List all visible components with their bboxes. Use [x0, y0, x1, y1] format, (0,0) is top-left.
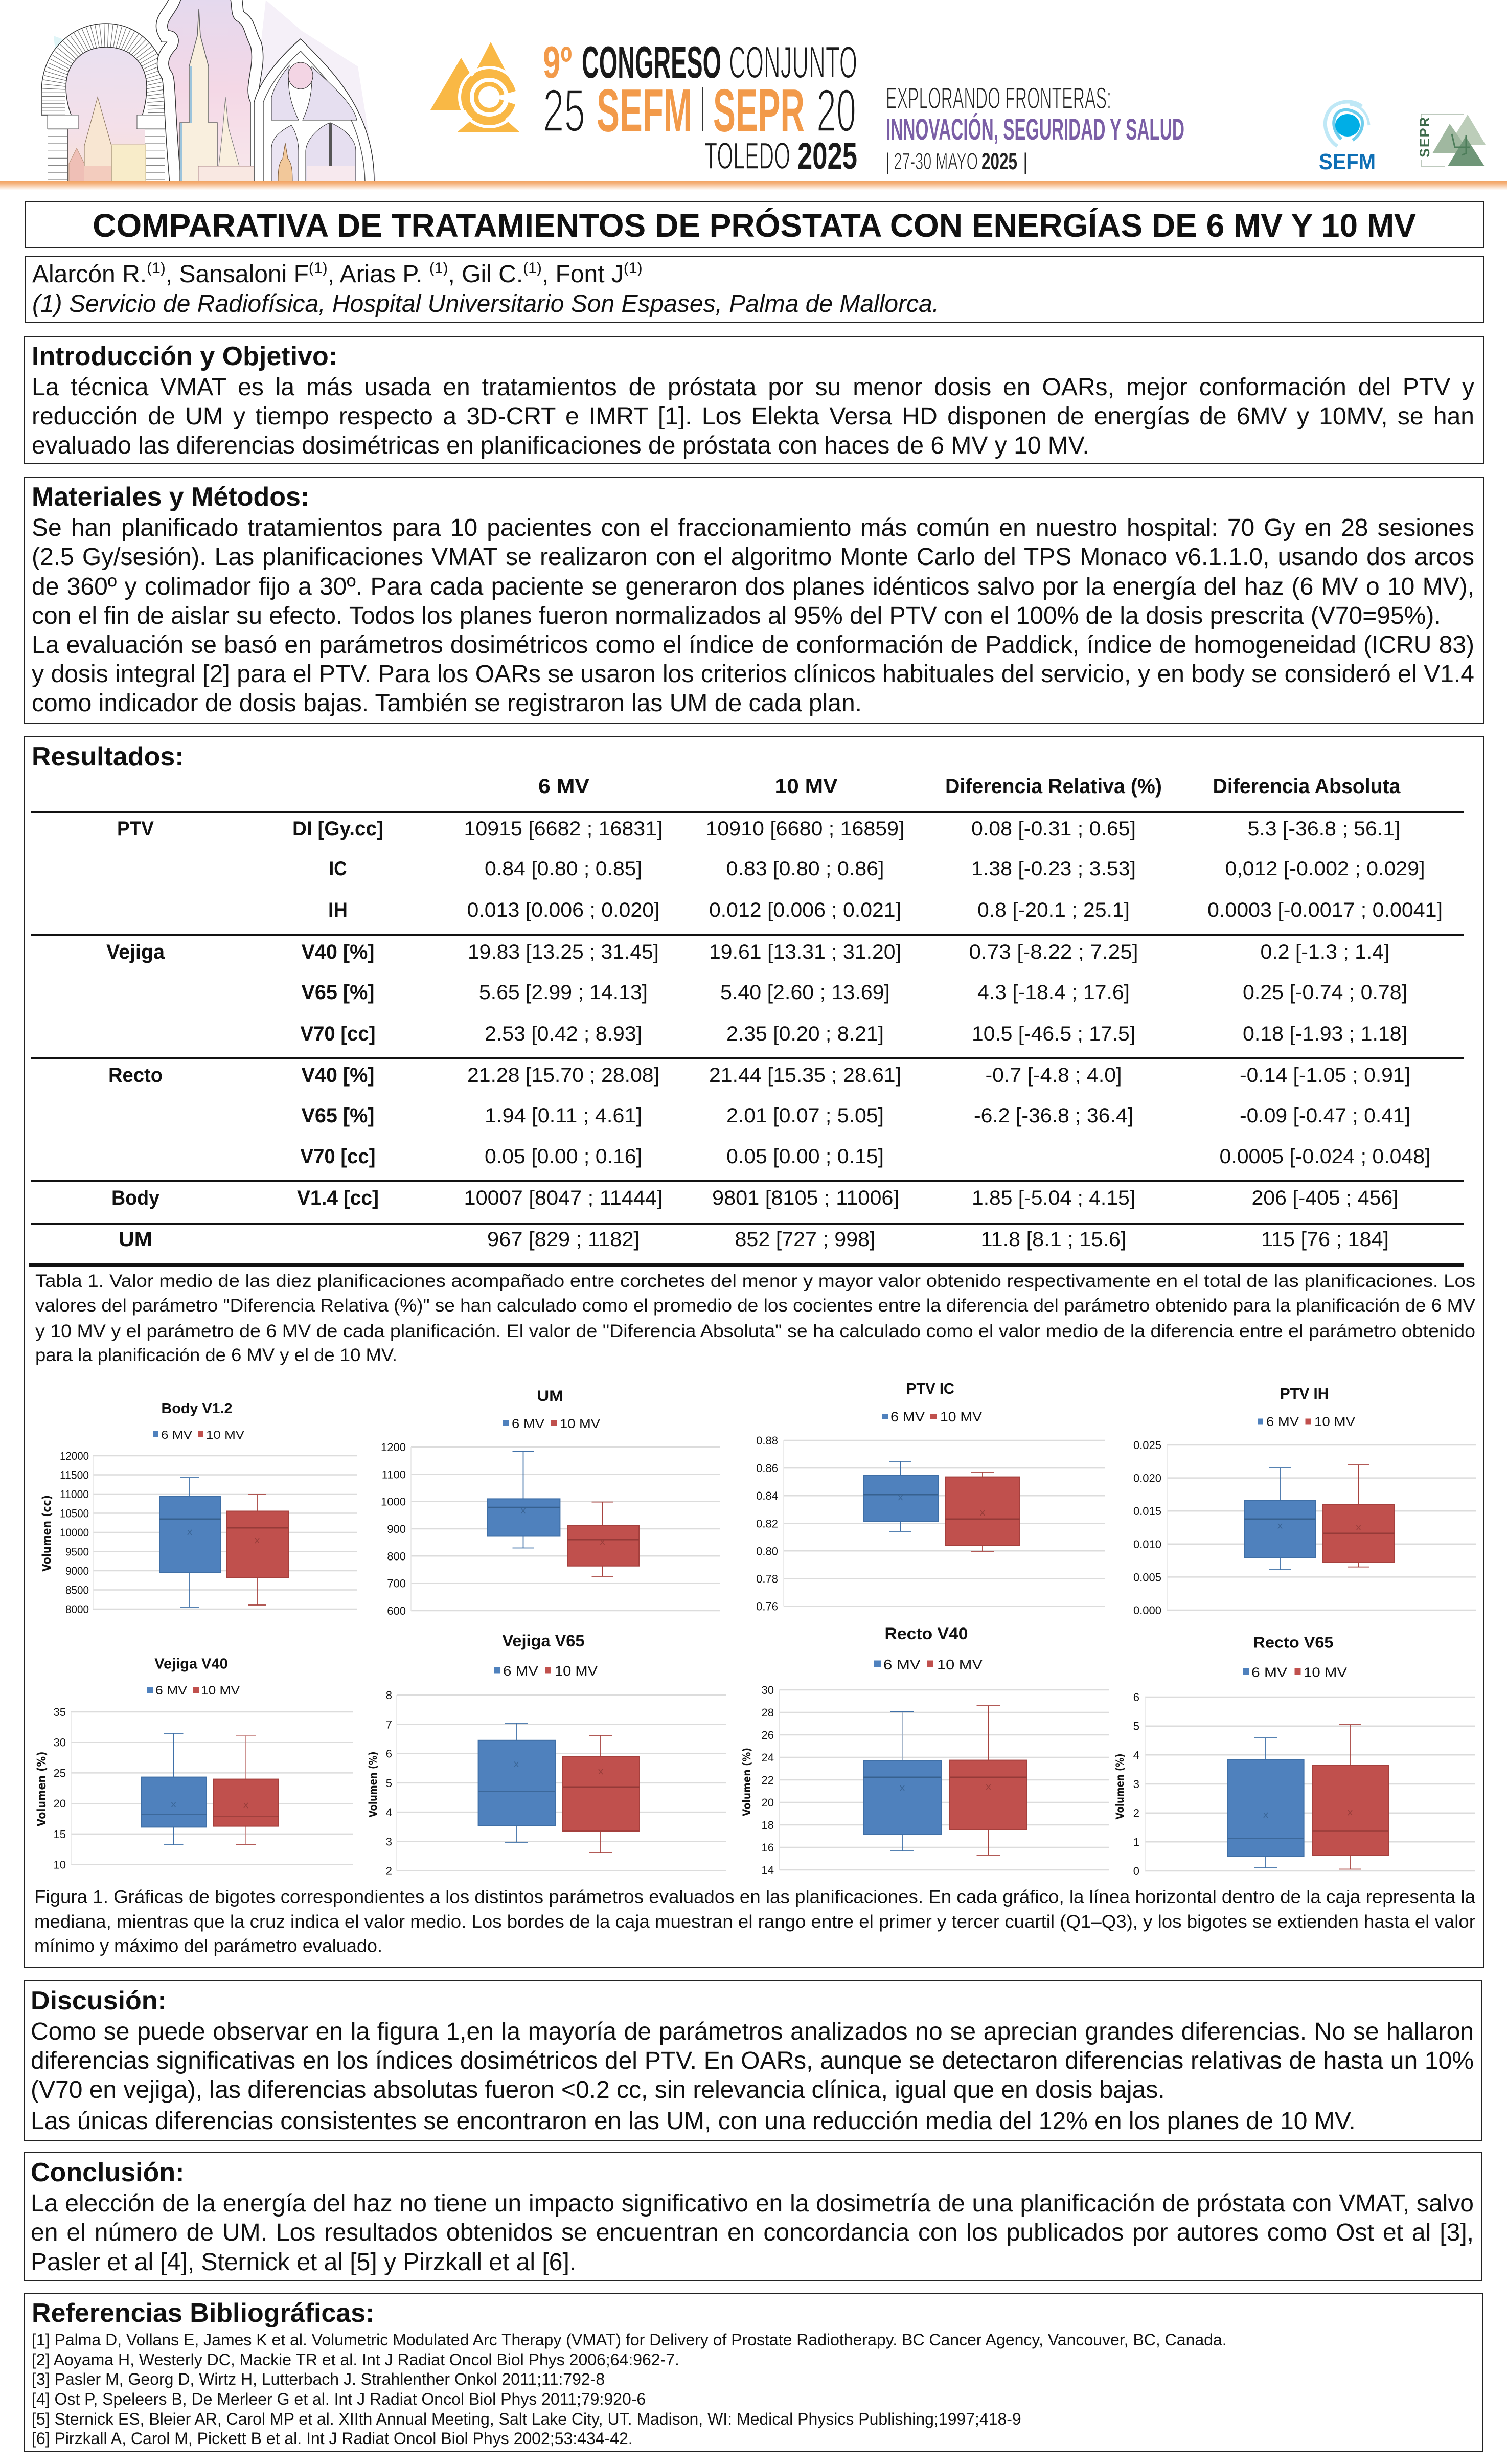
legend: 6 MV — [512, 1417, 544, 1431]
y axis labels — [756, 1434, 778, 1613]
y axis labels — [1133, 1439, 1161, 1617]
y axis labels: 2 — [1133, 1807, 1139, 1820]
table group: Vejiga: 19.61 [13.31 ; 31.20] — [709, 941, 901, 963]
heading: materials and methods: Materiales y Métodos: — [32, 482, 309, 512]
table group: Vejiga: 4.3 [-18.4 ; 17.6] — [977, 981, 1130, 1004]
table group: Recto: 0.05 [0.00 ; 0.16] — [485, 1145, 642, 1168]
table group: PTV: 0.84 [0.80 ; 0.85] — [485, 857, 642, 880]
table group: Recto: -0.14 [-1.05 ; 0.91] — [1240, 1064, 1410, 1087]
table group: PTV: 0.8 [-20.1 ; 25.1] — [977, 899, 1130, 921]
reference list: [3] Pasler M, Georg D, Wirtz H, Lutterbach J. Strahlenther Onkol 2011;11:792-8 — [32, 2370, 605, 2388]
y axis labels: 30 — [54, 1736, 66, 1749]
table header row: 10 MV — [775, 775, 838, 798]
legend — [147, 1684, 240, 1698]
table: dosimetric results — [29, 775, 1464, 1267]
text block: materials and methods: Se han planificado tratamientos para 10 pacientes con el fraccionamiento más común en nuestro hospital: 70 Gy en 28 sesiones — [32, 514, 1474, 541]
congress name — [543, 37, 857, 177]
y axis labels: 7 — [386, 1718, 392, 1731]
y axis labels: 1 — [1133, 1836, 1139, 1848]
table caption — [35, 1271, 1476, 1365]
legend — [882, 1409, 982, 1425]
y axis labels: 8000 — [65, 1603, 89, 1616]
legend: 10 MV — [1314, 1415, 1355, 1429]
illustration: Toledo arches and towers — [41, 0, 376, 182]
legend — [494, 1663, 598, 1679]
y axis labels: 0.005 — [1133, 1571, 1161, 1584]
text block: materials and methods: y dosis integral [2] para el PTV. Para los OARs se usaron los criterios clínicos habituales del servicio, y en body se consideró el V1.4 — [32, 661, 1474, 688]
results figure area — [29, 775, 1476, 1956]
y axis labels: 30 — [762, 1684, 774, 1697]
box: 6 MV — [488, 1451, 560, 1548]
table row: Body: 9801 [8105 ; 11006] — [712, 1187, 899, 1209]
reference list: [5] Sternick ES, Bleier AR, Carol MP et al. XIIth Annual Meeting, Salt Lake City, UT. Madison, WI: Medical Physics Publishing;1997;418-9 — [32, 2410, 1021, 2428]
y axis labels: 11000 — [60, 1488, 89, 1501]
y axis labels: 0.020 — [1133, 1472, 1161, 1485]
y axis labels: 6 — [386, 1748, 392, 1760]
text block: materials and methods: (2.5 Gy/sesión). Las planificaciones VMAT se realizaron con el algoritmo Monte Carlo del TPS Monaco v6.1.1.0, usando dos arcos — [32, 544, 1474, 571]
y axis labels: 900 — [387, 1523, 406, 1535]
y axis labels: 0.78 — [756, 1572, 778, 1585]
y axis labels: 700 — [387, 1577, 406, 1590]
table group: Recto: 21.44 [15.35 ; 28.61] — [709, 1064, 901, 1087]
chart title: PTV IC — [906, 1380, 954, 1397]
heading: results: Resultados: — [32, 742, 184, 772]
figure caption: mediana, mientras que la cruz indica el valor medio. Los bordes de la caja muestran el rango entre el primer y tercer cuartil (Q1–Q3), y los bigotes se extienden hasta el valor — [34, 1912, 1475, 1932]
table row: Body — [111, 1187, 1399, 1209]
congress name: CONGRESO — [582, 37, 721, 87]
text block: conclusion: Pasler et al [4], Sternick et al [5] y Pirzkall et al [6]. — [31, 2249, 576, 2276]
text block: introduction: reducción de UM y tiempo respecto a 3D-CRT e IMRT [1]. Los Elekta Versa HD disponen de energías de 6MV y 10MV, se han — [32, 403, 1474, 430]
congress name: 20 — [816, 77, 856, 145]
congress name: CONJUNTO — [729, 37, 857, 87]
icon: SEPR logo — [1417, 114, 1486, 166]
y axis labels: 9500 — [65, 1545, 89, 1558]
y axis labels — [381, 1441, 406, 1617]
table group: Vejiga: V40 [%] — [302, 941, 374, 963]
congress tagline: EXPLORANDO FRONTERAS: — [886, 82, 1111, 115]
y axis labels: 0.88 — [756, 1434, 778, 1447]
table group: Recto: V70 [cc] — [301, 1145, 375, 1168]
table group: Vejiga: 0.2 [-1.3 ; 1.4] — [1261, 941, 1389, 963]
heading: conclusion: Conclusión: — [31, 2158, 184, 2187]
panel: materials and methods — [24, 477, 1484, 724]
y axis labels: 4 — [386, 1806, 392, 1819]
box: 10 MV — [1312, 1725, 1388, 1869]
y axis title: Volumen (cc) — [40, 1495, 54, 1572]
box: 6 MV — [1228, 1738, 1304, 1868]
table row: UM — [119, 1228, 1389, 1251]
table group: Recto: 0.0005 [-0.024 ; 0.048] — [1220, 1145, 1430, 1168]
icon: SEFM logo — [1319, 102, 1376, 174]
y axis labels: 3 — [1133, 1778, 1139, 1791]
legend: 10 MV — [937, 1657, 983, 1672]
panel: discussion — [24, 1980, 1482, 2141]
text block: introduction: evaluado las diferencias dosimétricas en planificaciones de próstata con haces de 6 MV y 10 MV. — [32, 432, 1089, 459]
authors list: Alarcón R.(1), Sansaloni F(1), Arias P. (1), Gil C.(1), Font J(1) — [32, 260, 643, 288]
text block: discussion — [31, 2018, 1474, 2135]
y axis labels — [1133, 1691, 1139, 1878]
y axis labels: 0.82 — [756, 1517, 778, 1530]
y axis labels — [386, 1689, 392, 1878]
table group: Vejiga: V65 [%] — [302, 981, 374, 1004]
table group: Vejiga: 0.73 [-8.22 ; 7.25] — [969, 941, 1138, 963]
legend: 10 MV — [201, 1684, 240, 1698]
y axis labels: 8500 — [65, 1584, 89, 1596]
chart title: Body V1.2 — [162, 1400, 232, 1417]
y axis labels: 18 — [762, 1819, 774, 1832]
y axis title: Volumen (%) — [1114, 1754, 1126, 1819]
text block: materials and methods — [32, 514, 1474, 717]
table row: Body: Body — [111, 1187, 160, 1209]
reference list: [1] Palma D, Vollans E, James K et al. Volumetric Modulated Arc Therapy (VMAT) for Delivery of Prostate Radiotherapy. BC Cancer Agency, Vancouver, BC, Canada. — [32, 2331, 1227, 2349]
y axis labels: 0.000 — [1133, 1604, 1161, 1617]
y axis labels: 1000 — [381, 1496, 406, 1508]
legend — [874, 1657, 983, 1672]
chart title: PTV IH — [1280, 1385, 1329, 1403]
table group: Vejiga: Vejiga — [106, 941, 165, 963]
box: 6 MV — [141, 1733, 207, 1845]
legend: 6 MV — [883, 1657, 921, 1672]
text block: discussion: diferencias significativas en los índices dosimétricos del PTV. En OARs, aunque se detectaron diferencias relativas de hasta un 10% — [31, 2047, 1474, 2074]
box: 10 MV — [1323, 1465, 1395, 1567]
table row: UM: 11.8 [8.1 ; 15.6] — [980, 1228, 1127, 1251]
box: 10 MV — [227, 1495, 288, 1605]
text block: conclusion: en el número de UM. Los resultados obtenidos se encuentran en concordancia con los publicados por autores como Ost et al [3], — [31, 2219, 1474, 2246]
icon: SEPR logo: SEPR — [1417, 117, 1432, 157]
heading: poster title: COMPARATIVA DE TRATAMIENTOS DE PRÓSTATA CON ENERGÍAS DE 6 MV Y 10 MV — [93, 207, 1416, 244]
table row: Body: V1.4 [cc] — [297, 1187, 379, 1209]
table group: Vejiga: V70 [cc] — [301, 1023, 375, 1045]
legend — [153, 1428, 245, 1441]
y axis labels: 0 — [1133, 1865, 1139, 1878]
chart: PTV IH boxplot — [1133, 1385, 1476, 1617]
table group: PTV: 5.3 [-36.8 ; 56.1] — [1247, 818, 1401, 840]
text block: discussion: (V70 en vejiga), las diferencias absolutas fueron <0.2 cc, sin relevancia clínica, igual que en dosis bajas. — [31, 2076, 1165, 2104]
y axis labels: 1100 — [382, 1468, 406, 1481]
chart title: Recto V40 — [884, 1624, 968, 1643]
icon: SEFM logo: SEFM — [1319, 149, 1376, 174]
table group: Vejiga: 0.18 [-1.93 ; 1.18] — [1243, 1023, 1407, 1045]
chart title: Vejiga V65 — [502, 1632, 585, 1650]
y axis labels — [54, 1706, 66, 1871]
panel: title — [25, 201, 1484, 248]
box: 10 MV — [563, 1735, 640, 1853]
table group: Vejiga: 5.65 [2.99 ; 14.13] — [479, 981, 648, 1004]
y axis labels: 0.025 — [1133, 1439, 1161, 1452]
legend: 6 MV — [155, 1684, 187, 1698]
reference list: [4] Ost P, Speleers B, De Merleer G et al. Int J Radiat Oncol Biol Phys 2011;79:920-6 — [32, 2390, 646, 2408]
y axis labels: 10500 — [60, 1507, 89, 1520]
y axis labels: 9000 — [65, 1565, 89, 1577]
chart: Vejiga V65 boxplot — [367, 1632, 726, 1878]
y axis labels — [762, 1684, 774, 1877]
table group: PTV: 0.08 [-0.31 ; 0.65] — [971, 818, 1136, 840]
y axis title: Volumen (%) — [367, 1752, 379, 1817]
table group: Recto: 1.94 [0.11 ; 4.61] — [485, 1104, 642, 1127]
y axis labels: 5 — [386, 1777, 392, 1790]
table header row: Diferencia Absoluta — [1213, 775, 1401, 798]
table group: Vejiga — [106, 941, 1407, 1045]
congress tagline — [886, 82, 1184, 174]
legend: 10 MV — [206, 1428, 245, 1441]
y axis labels: 25 — [54, 1767, 66, 1779]
reference list: [2] Aoyama H, Westerly DC, Mackie TR et al. Int J Radiat Oncol Biol Phys 2006;64:962-7. — [32, 2350, 679, 2369]
header banner — [0, 0, 1507, 190]
y axis labels: 1200 — [381, 1441, 406, 1454]
panel: results — [24, 736, 1484, 1968]
table group: PTV — [117, 818, 1443, 921]
box: 6 MV — [863, 1712, 941, 1851]
y axis labels: 600 — [387, 1604, 406, 1617]
y axis labels: 0.86 — [756, 1462, 778, 1475]
y axis title: Volumen (%) — [35, 1752, 49, 1826]
y axis labels: 35 — [54, 1706, 66, 1719]
table caption: y 10 MV y el parámetro de 6 MV de cada planificación. El valor de "Diferencia Absoluta" se ha calculado como el valor medio de la diferencia entre el parámetro obtenido — [35, 1321, 1475, 1341]
table group: PTV: 0.0003 [-0.0017 ; 0.0041] — [1207, 899, 1443, 921]
box: 10 MV — [950, 1706, 1027, 1855]
box: 10 MV — [567, 1502, 639, 1576]
text block: materials and methods: con el fin de aislar su efecto. Todos los planes fueron normalizados al 95% del PTV con el 100% de la dosis prescrita (V70=95%). — [32, 602, 1441, 629]
table caption: para la planificación de 6 MV y el de 10 MV. — [35, 1345, 397, 1365]
legend — [503, 1417, 600, 1431]
chart: UM boxplot — [381, 1388, 720, 1617]
table caption: valores del parámetro "Diferencia Relativa (%)" se han calculado como el promedio de los cocientes entre la diferencia del parámetro obtenido para la planificación de 6 MV — [35, 1296, 1476, 1316]
heading: introduction: Introducción y Objetivo: — [32, 342, 337, 371]
box: 6 MV — [863, 1461, 938, 1531]
table header row: 6 MV — [538, 775, 589, 798]
congress tagline: | — [1022, 148, 1029, 174]
y axis labels: 800 — [387, 1550, 406, 1563]
table row: UM: 967 [829 ; 1182] — [487, 1228, 640, 1251]
congress tagline: 2025 — [981, 148, 1017, 174]
y axis labels: 10000 — [60, 1526, 89, 1539]
y axis labels: 10 — [54, 1859, 66, 1871]
text block: conclusion — [31, 2190, 1474, 2276]
congress name: 25 — [543, 77, 585, 145]
y axis title: Volumen (%) — [741, 1748, 753, 1816]
y axis labels: 0.015 — [1133, 1505, 1161, 1518]
table row: Body: 1.85 [-5.04 ; 4.15] — [972, 1187, 1135, 1209]
text block: conclusion: La elección de la energía del haz no tiene un impacto significativo en la dosimetría de una planificación de próstata con VMAT, salvo — [31, 2190, 1474, 2217]
table group: PTV: 10915 [6682 ; 16831] — [464, 818, 663, 840]
y axis labels: 3 — [386, 1835, 392, 1848]
congress name: 2025 — [797, 135, 857, 177]
legend: 10 MV — [560, 1417, 600, 1431]
table group: Vejiga: 19.83 [13.25 ; 31.45] — [468, 941, 659, 963]
panel: introduction — [24, 336, 1484, 464]
y axis labels: 6 — [1133, 1691, 1139, 1704]
table group: PTV: DI [Gy.cc] — [292, 818, 383, 840]
box: 6 MV — [478, 1723, 555, 1842]
figure caption — [34, 1887, 1476, 1956]
table group: Vejiga: 2.53 [0.42 ; 8.93] — [485, 1023, 642, 1045]
legend: 6 MV — [161, 1428, 193, 1441]
text block: materials and methods: como indicador de dosis bajas. También se registraron las UM de cada plan. — [32, 690, 862, 717]
table group: Vejiga: 2.35 [0.20 ; 8.21] — [726, 1023, 884, 1045]
table group: PTV: 0.013 [0.006 ; 0.020] — [467, 899, 659, 921]
legend: 6 MV — [890, 1409, 925, 1425]
figure caption: Figura 1. Gráficas de bigotes correspondientes a los distintos parámetros evaluados en las planificaciones. En cada gráfico, la línea horizontal dentro de la caja representa la — [34, 1887, 1476, 1907]
box: 10 MV — [945, 1472, 1020, 1551]
heading: discussion: Discusión: — [31, 1986, 167, 2016]
table header row: Diferencia Relativa (%) — [945, 775, 1162, 798]
congress tagline: INNOVACIÓN, SEGURIDAD Y SALUD — [886, 113, 1184, 146]
y axis labels: 12000 — [60, 1450, 89, 1462]
table group: PTV: PTV — [117, 818, 154, 840]
table row: Body: 206 [-405 ; 456] — [1251, 1187, 1399, 1209]
y axis labels: 15 — [54, 1828, 66, 1841]
table group: PTV: IH — [328, 899, 348, 921]
chart: Recto V65 boxplot — [1114, 1633, 1475, 1878]
y axis labels: 0.76 — [756, 1600, 778, 1613]
y axis labels: 0.84 — [756, 1489, 778, 1502]
box: 10 MV — [213, 1735, 279, 1844]
y axis labels — [60, 1450, 89, 1616]
legend: 6 MV — [503, 1663, 538, 1679]
heading: references: Referencias Bibliográficas: — [32, 2298, 374, 2328]
table group: Recto — [108, 1064, 1430, 1168]
table caption: Tabla 1. Valor medio de las diez planificaciones acompañado entre corchetes del menor y mayor valor obtenido respectivamente en el total de las planificaciones. Los — [35, 1271, 1475, 1291]
text block: introduction — [32, 374, 1474, 459]
table row: UM: 852 [727 ; 998] — [735, 1228, 875, 1251]
affiliation: (1) Servicio de Radiofísica, Hospital Universitario Son Espases, Palma de Mallorca. — [32, 290, 939, 318]
y axis labels: 20 — [54, 1797, 66, 1810]
y axis labels: 2 — [386, 1865, 392, 1878]
table row: Body: 10007 [8047 ; 11444] — [464, 1187, 663, 1209]
legend — [1243, 1665, 1348, 1680]
panel: authors — [25, 256, 1484, 323]
legend — [1258, 1415, 1355, 1429]
text block: materials and methods: de 360º y colimador fijo a 30º. Para cada paciente se generaron dos planes idénticos salvo por la energía del haz (6 MV o 10 MV), — [32, 573, 1474, 600]
table group: PTV: 0.83 [0.80 ; 0.86] — [726, 857, 884, 880]
table group: Recto: -6.2 [-36.8 ; 36.4] — [974, 1104, 1133, 1127]
reference list: [6] Pirzkall A, Carol M, Pickett B et al. Int J Radiat Oncol Biol Phys 2002;53:434-42. — [32, 2429, 633, 2448]
table group: PTV: IC — [329, 857, 347, 880]
icon: congress logo — [430, 42, 527, 132]
table group: Vejiga: 10.5 [-46.5 ; 17.5] — [972, 1023, 1135, 1045]
orange divider band — [0, 181, 1507, 190]
table group: PTV: 1.38 [-0.23 ; 3.53] — [971, 857, 1136, 880]
legend: 10 MV — [1304, 1665, 1348, 1680]
figure caption: mínimo y máximo del parámetro evaluado. — [34, 1936, 382, 1956]
panel: references — [24, 2293, 1483, 2452]
table group: Recto: 2.01 [0.07 ; 5.05] — [726, 1104, 884, 1127]
y axis labels: 5 — [1133, 1720, 1139, 1733]
table group: PTV: 0.012 [0.006 ; 0.021] — [709, 899, 901, 921]
y axis labels: 22 — [762, 1774, 774, 1787]
legend: 6 MV — [1251, 1665, 1288, 1680]
y axis labels: 20 — [762, 1796, 774, 1809]
table group: Recto: 21.28 [15.70 ; 28.08] — [467, 1064, 659, 1087]
table group: Recto: Recto — [108, 1064, 163, 1087]
y axis labels: 11500 — [60, 1468, 89, 1482]
y axis labels: 8 — [386, 1689, 392, 1702]
table row: UM: 115 [76 ; 184] — [1261, 1228, 1389, 1251]
table row: UM: UM — [119, 1228, 152, 1251]
chart: Recto V40 boxplot — [741, 1624, 1109, 1877]
congress name: 9º — [543, 37, 572, 87]
text block: discussion: Las únicas diferencias consistentes se encontraron en las UM, con una reducción media del 12% en los planes de 10 MV. — [31, 2108, 1356, 2135]
chart title: Vejiga V40 — [154, 1656, 228, 1672]
text block: materials and methods: La evaluación se basó en parámetros dosimétricos como el índice de conformación de Paddick, índice de homogeneidad (ICRU 83) — [32, 631, 1474, 659]
table group: Recto: -0.7 [-4.8 ; 4.0] — [986, 1064, 1122, 1087]
congress name: SEPR — [713, 77, 805, 145]
chart title: UM — [537, 1388, 563, 1405]
text block: introduction: La técnica VMAT es la más usada en tratamientos de próstata por su menor dosis en OARs, mejor conformación del PTV y — [32, 374, 1474, 401]
table group: Recto: V65 [%] — [302, 1104, 374, 1127]
panel: conclusion — [24, 2152, 1482, 2281]
legend: 10 MV — [555, 1663, 598, 1679]
y axis labels: 26 — [762, 1729, 774, 1742]
table group: Vejiga: 5.40 [2.60 ; 13.69] — [720, 981, 890, 1004]
table group: PTV: 0,012 [-0.002 ; 0.029] — [1225, 857, 1425, 880]
y axis labels: 0.010 — [1133, 1538, 1161, 1551]
table group: Recto: -0.09 [-0.47 ; 0.41] — [1240, 1104, 1410, 1127]
y axis labels: 28 — [762, 1706, 774, 1719]
y axis labels: 4 — [1133, 1749, 1139, 1761]
table header row — [538, 775, 1401, 798]
table group: Recto: V40 [%] — [302, 1064, 374, 1087]
table group: Vejiga: 0.25 [-0.74 ; 0.78] — [1243, 981, 1407, 1004]
table group: PTV: 10910 [6680 ; 16859] — [705, 818, 905, 840]
y axis labels: 24 — [762, 1751, 774, 1764]
congress tagline: | 27-30 MAYO — [886, 148, 978, 174]
text block: discussion: Como se puede observar en la figura 1,en la mayoría de parámetros analizados no se aprecian grandes diferencias. No se hallaron — [31, 2018, 1474, 2045]
y axis labels: 0.80 — [756, 1545, 778, 1557]
chart: PTV IC boxplot — [756, 1380, 1105, 1613]
box: 6 MV — [159, 1478, 221, 1607]
congress name: TOLEDO — [704, 135, 790, 177]
legend: 6 MV — [1266, 1415, 1299, 1429]
chart: Body V1.2 boxplot — [40, 1400, 357, 1616]
congress name: SEFM — [597, 77, 692, 145]
chart: Vejiga V40 boxplot — [35, 1656, 353, 1871]
legend: 10 MV — [940, 1409, 982, 1425]
chart title: Recto V65 — [1253, 1633, 1333, 1652]
reference list — [32, 2331, 1227, 2448]
y axis labels: 16 — [762, 1841, 774, 1854]
y axis labels: 14 — [762, 1864, 774, 1877]
table group: Recto: 0.05 [0.00 ; 0.15] — [726, 1145, 884, 1168]
box: 6 MV — [1244, 1468, 1316, 1570]
